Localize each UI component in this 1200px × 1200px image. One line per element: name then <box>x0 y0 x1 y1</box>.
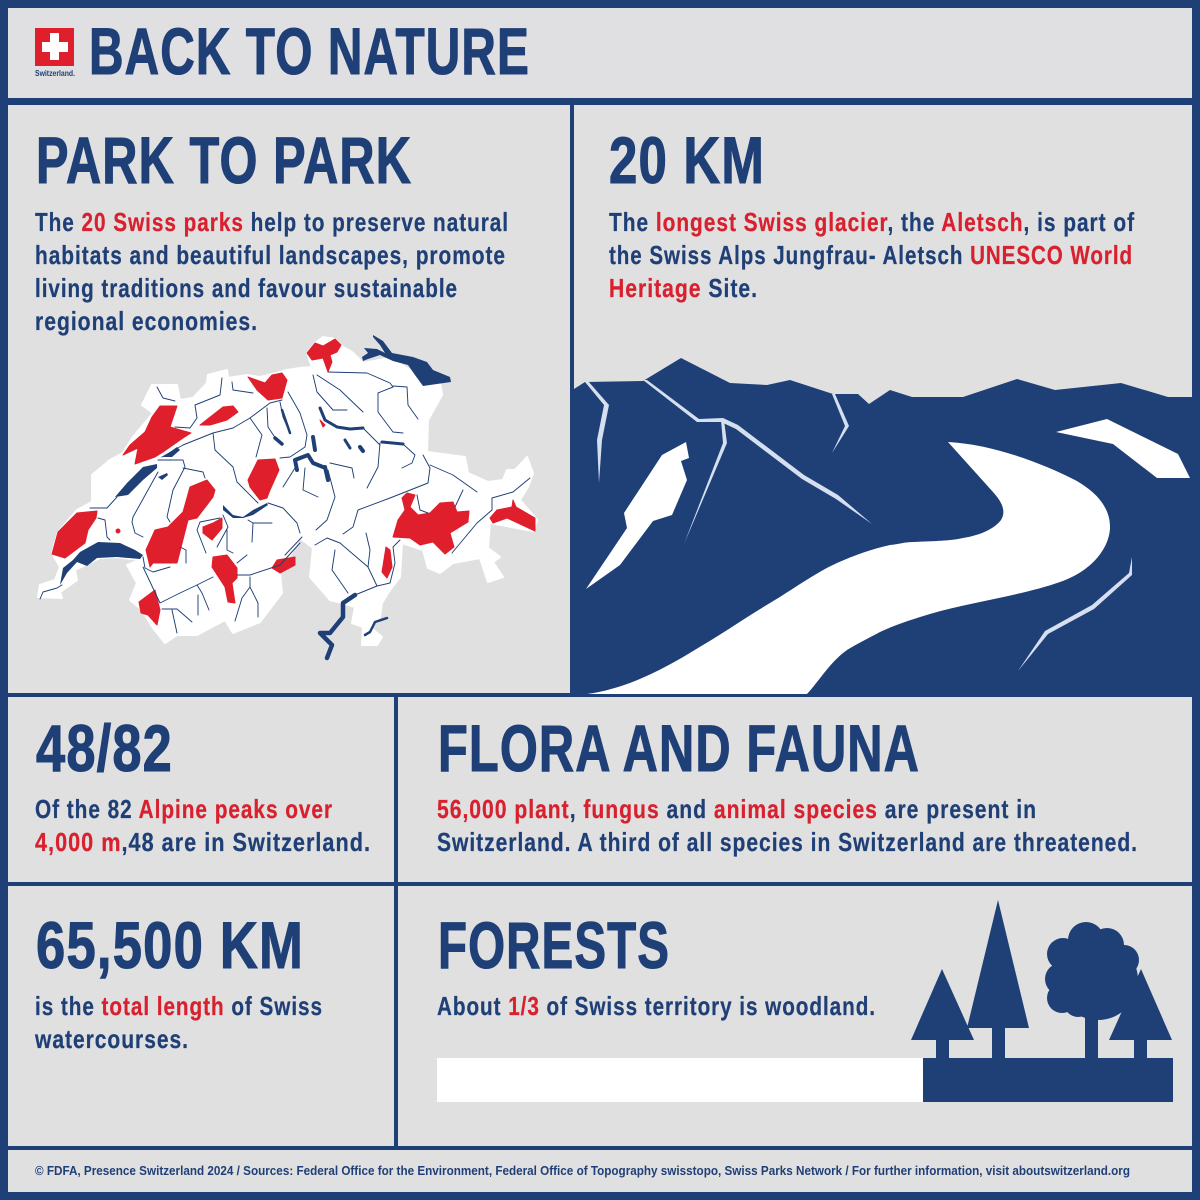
panel: header <box>8 8 1192 98</box>
rivers <box>40 372 530 633</box>
icon: trees <box>911 900 1172 1060</box>
map land outline <box>38 337 537 645</box>
panel: 48/82 <box>8 697 394 882</box>
heading: 20 km: 20 KM <box>609 123 765 197</box>
panel: flora and fauna <box>398 697 1192 882</box>
heading: forests: FORESTS <box>438 908 670 982</box>
illustration: Aletsch glacier and mountains <box>574 358 1192 694</box>
text block: glacier description <box>609 207 1135 303</box>
map of Switzerland <box>38 335 537 658</box>
panel: 20 km <box>574 105 1192 694</box>
text block: alpine peaks: 4,000 m,48 are in Switzerland. <box>35 827 371 857</box>
text block: parks description <box>35 207 509 336</box>
snow patch right <box>1056 419 1190 478</box>
title: BACK TO NATURE <box>89 14 530 88</box>
panel: footer <box>8 1150 1192 1192</box>
text block: parks description: The 20 Swiss parks help to preserve natural <box>35 207 509 237</box>
heading: flora and fauna: FLORA AND FAUNA <box>438 711 920 785</box>
text block: species: 56,000 plant, fungus and animal species are present in <box>437 794 1037 824</box>
glacier <box>587 442 1110 694</box>
text block: glacier description: The longest Swiss glacier, the Aletsch, is part of <box>609 207 1135 237</box>
text block: species <box>437 794 1138 857</box>
heading: 48/82: 48/82 <box>36 711 173 785</box>
footer sources: © FDFA, Presence Switzerland 2024 / Sources: Federal Office for the Environment, Federal Office of Topography swisstopo, Swiss Parks Network / For further information, visit aboutswitzerland.org <box>35 1164 1130 1178</box>
bar: one third woodland <box>437 1058 1173 1102</box>
text block: glacier description: the Swiss Alps Jungfrau- Aletsch UNESCO World <box>609 240 1133 270</box>
panel: park to park <box>8 105 570 693</box>
mountains <box>574 358 1192 694</box>
text block: watercourses: is the total length of Swiss <box>35 991 323 1021</box>
snow patch left <box>586 442 689 589</box>
heading: park to park: PARK TO PARK <box>36 123 412 197</box>
mountain cracks <box>585 380 1132 671</box>
text block: alpine peaks: Of the 82 Alpine peaks over <box>35 794 333 824</box>
icon: Switzerland logo: Switzerland. <box>35 68 75 78</box>
text block: parks description: living traditions and favour sustainable <box>35 273 458 303</box>
panel: 65,500 km <box>8 886 394 1146</box>
lakes <box>60 335 451 658</box>
text block: parks description: regional economies. <box>35 306 258 336</box>
text block: woodland: About 1/3 of Swiss territory is woodland. <box>437 991 876 1021</box>
text block: alpine peaks <box>35 794 371 857</box>
icon: Switzerland logo <box>35 28 75 78</box>
parks in red <box>52 339 535 625</box>
panel: forests <box>398 886 1192 1146</box>
text block: watercourses <box>34 991 323 1054</box>
text block: glacier description: Heritage Site. <box>609 273 758 303</box>
text block: watercourses: watercourses. <box>34 1024 189 1054</box>
text block: parks description: habitats and beautiful landscapes, promote <box>35 240 506 270</box>
heading: 65,500 km: 65,500 KM <box>36 908 304 982</box>
